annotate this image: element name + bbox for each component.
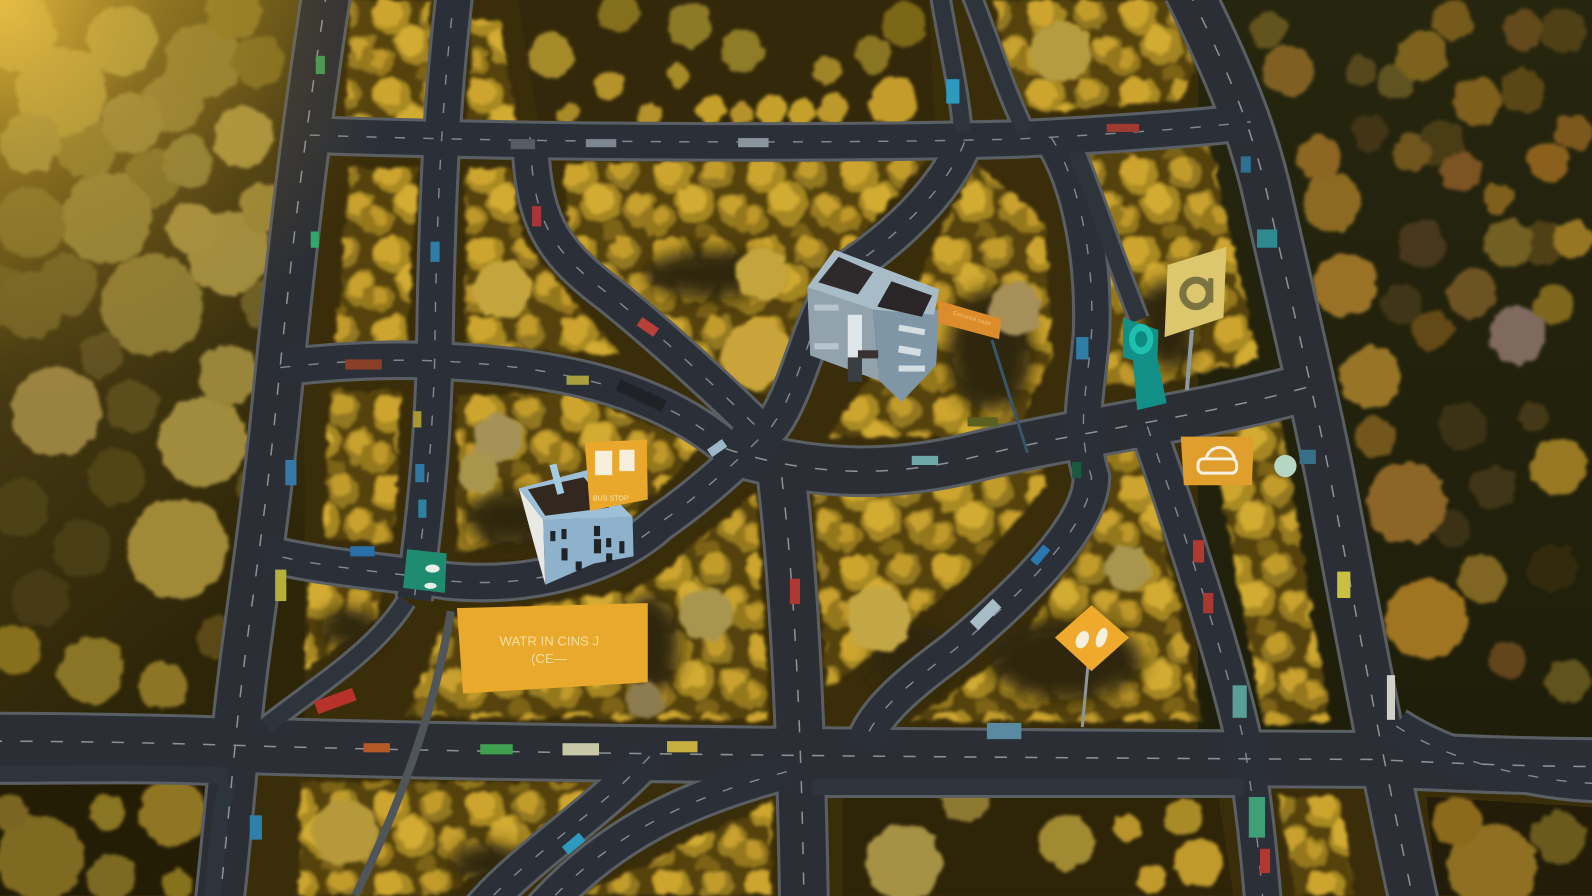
vehicles (250, 56, 1395, 873)
panel: left forest (0, 0, 305, 721)
panel: dark clearing with trees, top centre (518, 0, 934, 126)
elevated ramp (355, 611, 451, 895)
sign: orange street label: Entrance route (952, 310, 993, 328)
vignette: sun glow (0, 0, 508, 457)
sign: yellow bus stop card: BUS STOP (593, 495, 629, 503)
shaded clearings and tan tree crowns inside the blocks (313, 22, 1198, 883)
panel: right forest (1198, 0, 1592, 741)
panel: bottom-left forest (0, 779, 213, 896)
sign: diamond road sign (1055, 605, 1129, 727)
panel: yellow tree blocks (300, 0, 1355, 895)
building: blue house (519, 463, 634, 585)
panel: dark lower block with trees (843, 773, 1234, 896)
panel: bottom-right forest (1426, 797, 1592, 896)
building: grey office block (807, 250, 939, 402)
icon: teal traffic marker (1123, 318, 1167, 410)
sign: orange bus icon (1181, 437, 1254, 485)
sign: large yellow warning board (457, 603, 648, 693)
sign: yellow bus stop card (585, 440, 648, 511)
sign: green route board (403, 549, 447, 593)
sign: pale yellow logo board (1165, 247, 1226, 390)
sign: large yellow warning board: (CE— (531, 651, 568, 666)
sign: orange street label (938, 301, 1027, 453)
sign: large yellow warning board: WATR IN CINS J (500, 634, 599, 649)
icon: pale round marker (1274, 455, 1297, 477)
